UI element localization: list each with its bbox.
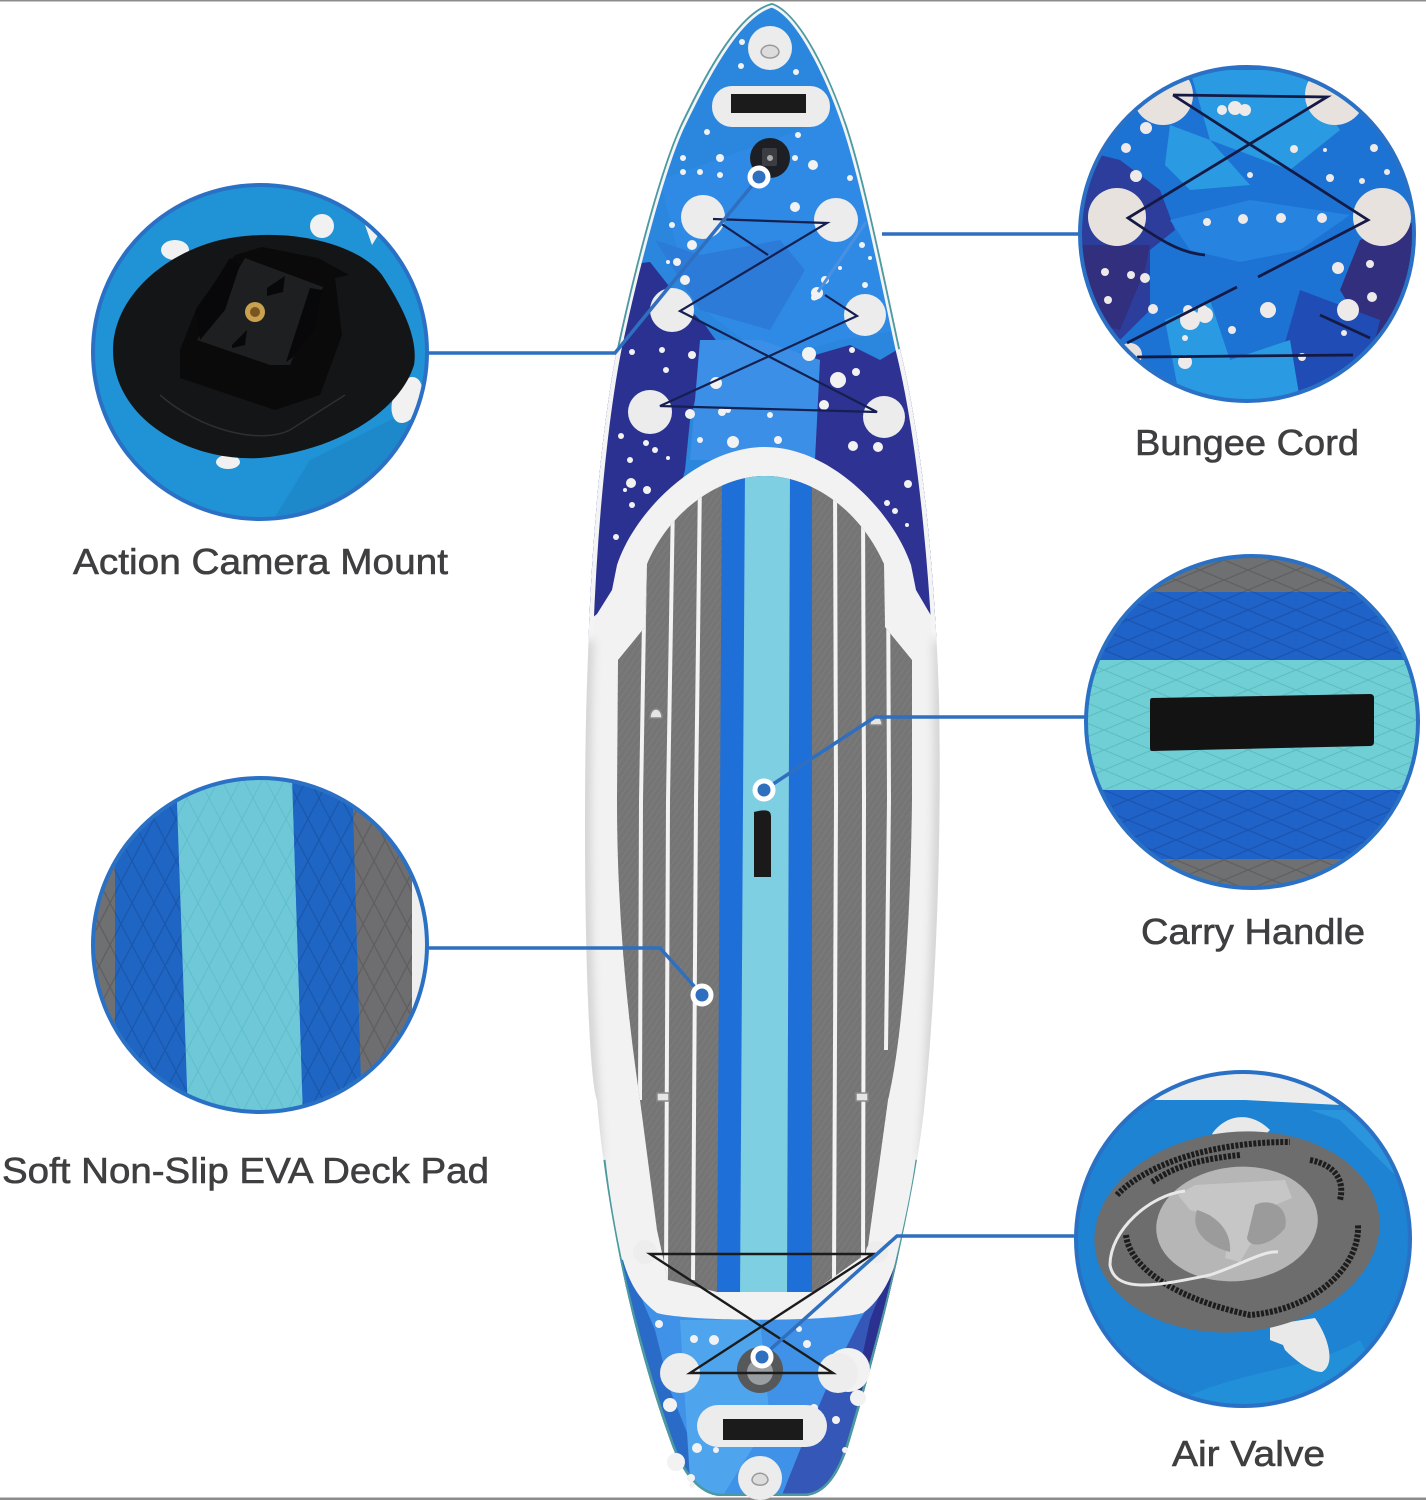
bungee cord bbox=[660, 219, 877, 412]
connector: deck pad bbox=[428, 948, 702, 995]
deck D-rings bbox=[650, 709, 882, 1101]
aqua stripe bbox=[740, 470, 790, 1300]
pull cord bbox=[1110, 1191, 1278, 1285]
tail carry handle bbox=[697, 1405, 827, 1447]
board base bbox=[570, 0, 960, 1500]
inner valve cover bbox=[1156, 1166, 1318, 1282]
tail artwork bbox=[616, 1240, 902, 1496]
label: action camera mount: Action Camera Mount bbox=[73, 541, 448, 582]
nose artwork bbox=[588, 3, 936, 638]
rear anchors bbox=[633, 1240, 888, 1393]
center carry handle bbox=[754, 810, 771, 877]
mount tabs bbox=[232, 276, 285, 348]
connector: carry handle bbox=[764, 717, 1087, 790]
printed ring text marks bbox=[1117, 1142, 1358, 1315]
mount side rails bbox=[196, 258, 322, 362]
connector: air valve bbox=[762, 1236, 1075, 1357]
groove lines bbox=[640, 480, 889, 1280]
connector: camera bbox=[428, 177, 759, 353]
blue stripes bbox=[717, 470, 812, 1300]
label: soft non-slip EVA deck pad: Soft Non-Slip EVA Deck Pad bbox=[2, 1150, 489, 1191]
anchors bbox=[1088, 65, 1411, 367]
rim line bbox=[588, 3, 772, 657]
label: bungee cord: Bungee Cord bbox=[1135, 422, 1359, 463]
teal edge left bbox=[617, 3, 772, 349]
top tie-down ring bbox=[748, 26, 792, 70]
marker: deck pad bbox=[693, 986, 711, 1004]
tail rim bbox=[603, 1160, 918, 1496]
circle: bungee cord detail bbox=[1075, 60, 1420, 410]
gray base plate bbox=[1094, 1131, 1380, 1333]
mount top plate bbox=[197, 258, 323, 365]
nose carry handle bbox=[712, 86, 830, 127]
circle: deck pad detail bbox=[90, 775, 432, 1115]
rear bungee cord bbox=[650, 1254, 873, 1373]
splatter bbox=[1101, 101, 1390, 369]
mount block bbox=[180, 247, 349, 410]
black handle bbox=[1150, 694, 1374, 751]
bungee anchor points bbox=[628, 195, 905, 438]
valve cap bbox=[1178, 1180, 1292, 1262]
label: air valve: Air Valve bbox=[1172, 1433, 1325, 1474]
label: carry handle: Carry Handle bbox=[1141, 911, 1365, 952]
frame line bottom bbox=[0, 1498, 1426, 1500]
base steps bbox=[160, 395, 345, 436]
soft rail shading bbox=[585, 640, 940, 1160]
frame line top bbox=[0, 0, 1426, 2]
circle: carry handle detail bbox=[1080, 550, 1425, 895]
rear air valve bbox=[737, 1347, 783, 1393]
splatter dots tail bbox=[655, 1320, 870, 1488]
teal edge right bbox=[772, 3, 900, 349]
marker: camera bbox=[750, 168, 768, 186]
splatter dots nose bbox=[613, 39, 912, 540]
brass insert bbox=[245, 302, 265, 322]
circle: air valve detail bbox=[1070, 1065, 1426, 1415]
camera mount bbox=[750, 138, 790, 178]
tail tie-down ring bbox=[738, 1456, 782, 1500]
circle: action camera mount detail bbox=[90, 180, 430, 525]
paddle board bbox=[570, 0, 960, 1500]
connector: bungee bbox=[818, 222, 1080, 292]
white spots bbox=[161, 214, 428, 469]
marker: air valve bbox=[753, 1348, 771, 1366]
marker: carry handle bbox=[755, 781, 773, 799]
white deck border bbox=[588, 447, 936, 1320]
black base disc bbox=[113, 235, 415, 458]
cords bbox=[1127, 95, 1370, 357]
rim line right bbox=[772, 3, 939, 700]
deck pad bbox=[617, 476, 912, 1292]
white spots bbox=[1212, 1117, 1329, 1372]
